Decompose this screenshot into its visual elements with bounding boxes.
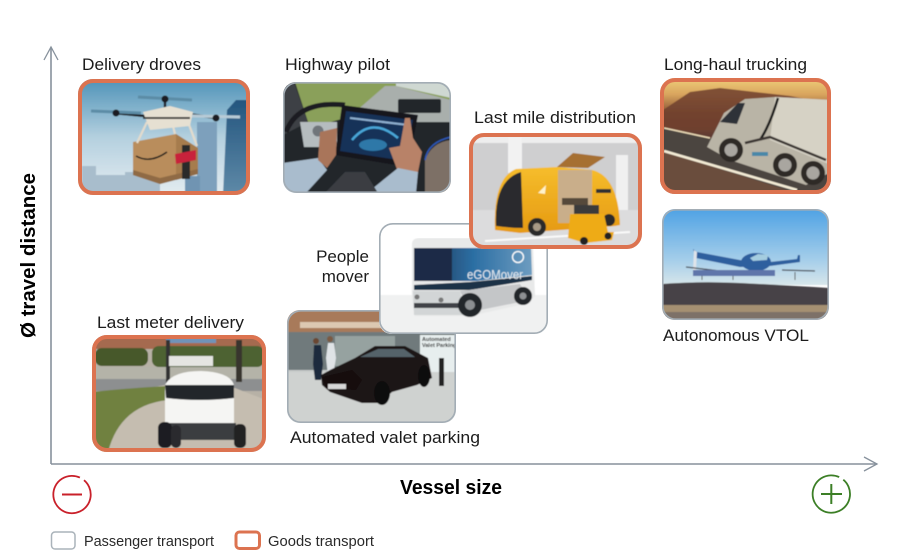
card: last meter delivery: [92, 335, 266, 452]
label: long-haul trucking: Long-haul trucking: [664, 55, 807, 74]
label: people mover second line: mover: [322, 267, 369, 286]
card: highway pilot: [283, 82, 451, 193]
icon: minus: [53, 476, 91, 513]
label: valet parking: Automated valet parking: [290, 428, 480, 447]
label: delivery drones: Delivery droves: [82, 55, 201, 74]
label: autonomous VTOL: Autonomous VTOL: [663, 326, 809, 345]
card: automated valet parking: [287, 310, 457, 423]
legend: passenger transport: Passenger transport: [84, 534, 214, 550]
icon: plus: [813, 475, 850, 513]
label: people mover: People: [316, 247, 369, 266]
card: people mover: eGOMover: [467, 267, 524, 282]
x axis arrow: [51, 457, 877, 471]
legend: goods transport: [236, 532, 374, 550]
legend: goods transport: Goods transport: [268, 534, 374, 550]
y axis arrow: [44, 47, 58, 464]
y axis title: Ø travel distance: [18, 173, 40, 338]
label: last meter delivery: Last meter delivery: [97, 313, 244, 332]
label: last mile distribution: Last mile distribution: [474, 108, 636, 127]
x axis title: Vessel size: [400, 477, 502, 499]
card: autonomous VTOL: [662, 209, 829, 320]
card: automated valet parking: Automated: [422, 337, 451, 343]
card: automated valet parking: Valet Parking: [422, 343, 457, 349]
label: highway pilot: Highway pilot: [285, 55, 390, 74]
card: last mile distribution: [469, 133, 642, 249]
card: long-haul trucking: [660, 78, 831, 194]
card: delivery drones: [78, 79, 250, 195]
card: people mover: [379, 223, 548, 334]
